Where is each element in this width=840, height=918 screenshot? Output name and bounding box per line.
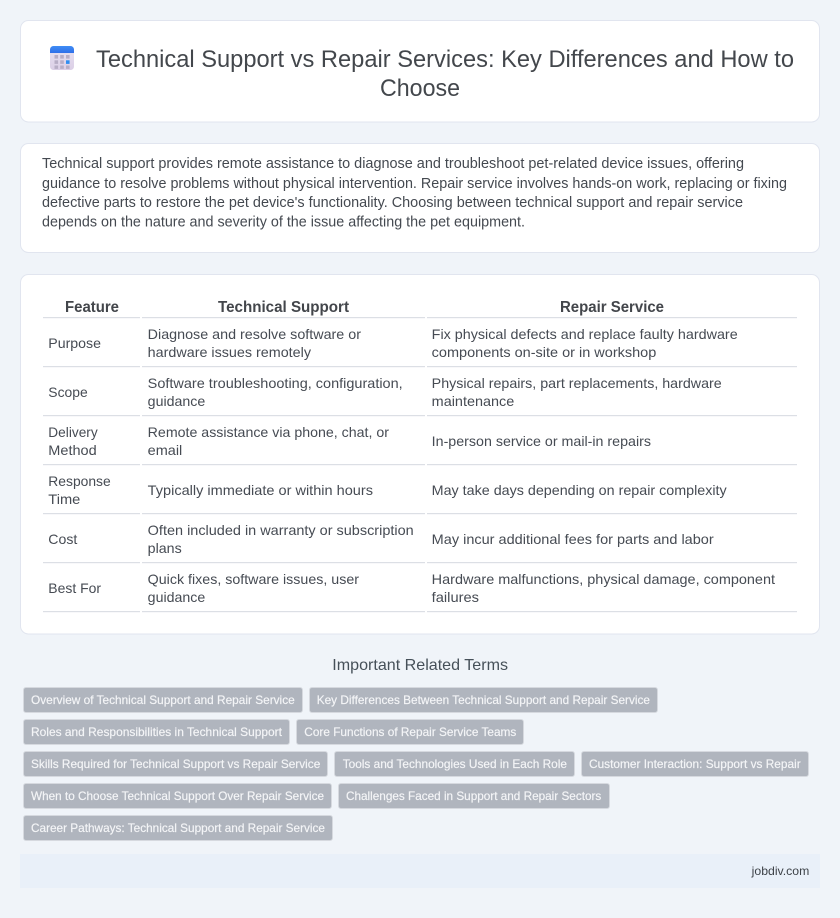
tag: Customer Interaction: Support vs Repair bbox=[589, 757, 801, 771]
heading: important related terms: Important Related Terms bbox=[332, 657, 508, 674]
table header row bbox=[65, 299, 664, 316]
row: purpose: Diagnose and resolve software or bbox=[148, 326, 361, 342]
row: purpose: hardware issues remotely bbox=[148, 344, 311, 360]
title: Choose bbox=[380, 75, 460, 102]
tag bbox=[334, 752, 574, 776]
table header row: Repair Service bbox=[560, 299, 664, 316]
row: delivery method: In-person service or mail-in repairs bbox=[432, 433, 651, 449]
summary text: Technical support provides remote assistance to diagnose and troubleshoot pet-related device issues, offering bbox=[42, 156, 744, 172]
row: best for: failures bbox=[432, 589, 479, 605]
tag bbox=[24, 688, 302, 712]
tag bbox=[24, 752, 328, 776]
tag: Skills Required for Technical Support vs Repair Service bbox=[31, 757, 321, 771]
row: purpose bbox=[48, 326, 738, 360]
row: best for: guidance bbox=[148, 589, 206, 605]
tag: Tools and Technologies Used in Each Role bbox=[343, 757, 567, 771]
tag: Roles and Responsibilities in Technical Support bbox=[31, 725, 283, 739]
panel: summary paragraph bbox=[20, 144, 820, 252]
row: cost: Often included in warranty or subscription bbox=[148, 522, 414, 538]
panel: title card bbox=[20, 20, 820, 122]
row: cost: May incur additional fees for parts and labor bbox=[432, 531, 714, 547]
panel: comparison table bbox=[20, 274, 820, 634]
row: scope: maintenance bbox=[432, 393, 515, 409]
summary text: defective parts to restore the pet device's functionality. Choosing between technical support and repair service bbox=[42, 195, 743, 211]
row: delivery method bbox=[48, 424, 651, 458]
tag bbox=[24, 720, 290, 744]
tag bbox=[24, 784, 332, 808]
tag bbox=[296, 720, 524, 744]
row: scope: Scope bbox=[48, 384, 88, 400]
tag: Key Differences Between Technical Support and Repair Service bbox=[317, 693, 650, 707]
summary text: depends on the nature and severity of the issue affecting the pet equipment. bbox=[42, 214, 525, 230]
row: scope: Physical repairs, part replacements, hardware bbox=[432, 375, 722, 391]
row: delivery method: Remote assistance via phone, chat, or bbox=[148, 424, 389, 440]
icon: calendar bbox=[50, 46, 74, 70]
row: best for: Best For bbox=[48, 580, 101, 596]
title bbox=[96, 46, 794, 102]
row: response time: Response bbox=[48, 473, 111, 489]
tag: Challenges Faced in Support and Repair Sectors bbox=[346, 789, 601, 803]
row: scope bbox=[48, 375, 722, 409]
row: scope: Software troubleshooting, configuration, bbox=[148, 375, 403, 391]
row: scope: guidance bbox=[148, 393, 206, 409]
tag bbox=[310, 688, 658, 712]
tag bbox=[24, 816, 332, 840]
row: response time bbox=[48, 473, 727, 507]
title: Technical Support vs Repair Services: Key Differences and How to bbox=[96, 46, 794, 73]
row: delivery method: email bbox=[148, 442, 182, 458]
row: purpose: Purpose bbox=[48, 335, 101, 351]
row: cost: plans bbox=[148, 540, 182, 556]
footer bar: jobdiv.com bbox=[751, 864, 809, 878]
tag bbox=[338, 784, 610, 808]
row: delivery method: Delivery bbox=[48, 424, 98, 440]
row: delivery method: Method bbox=[48, 442, 97, 458]
tag: Core Functions of Repair Service Teams bbox=[304, 725, 516, 739]
panel: related term tags bbox=[24, 688, 808, 840]
summary text bbox=[42, 156, 787, 230]
footer bar bbox=[20, 854, 820, 888]
table header row: Technical Support bbox=[218, 299, 350, 316]
row: purpose: components on-site or in workshop bbox=[432, 344, 657, 360]
row: cost bbox=[48, 522, 714, 556]
tag: Overview of Technical Support and Repair Service bbox=[31, 693, 295, 707]
row: best for bbox=[48, 571, 775, 605]
tag: Career Pathways: Technical Support and Repair Service bbox=[31, 821, 325, 835]
row: response time: Typically immediate or within hours bbox=[148, 482, 373, 498]
summary text: guidance to resolve problems without physical intervention. Repair service involves hands-on work, replacing or fixing bbox=[42, 176, 787, 192]
table header row: Feature bbox=[65, 299, 119, 316]
tag bbox=[582, 752, 808, 776]
row: best for: Hardware malfunctions, physical damage, component bbox=[432, 571, 775, 587]
tag: When to Choose Technical Support Over Repair Service bbox=[31, 789, 324, 803]
row: response time: Time bbox=[48, 491, 81, 507]
row: purpose: Fix physical defects and replace faulty hardware bbox=[432, 326, 738, 342]
row: best for: Quick fixes, software issues, user bbox=[148, 571, 359, 587]
row: cost: Cost bbox=[48, 531, 77, 547]
row: response time: May take days depending on repair complexity bbox=[432, 482, 727, 498]
